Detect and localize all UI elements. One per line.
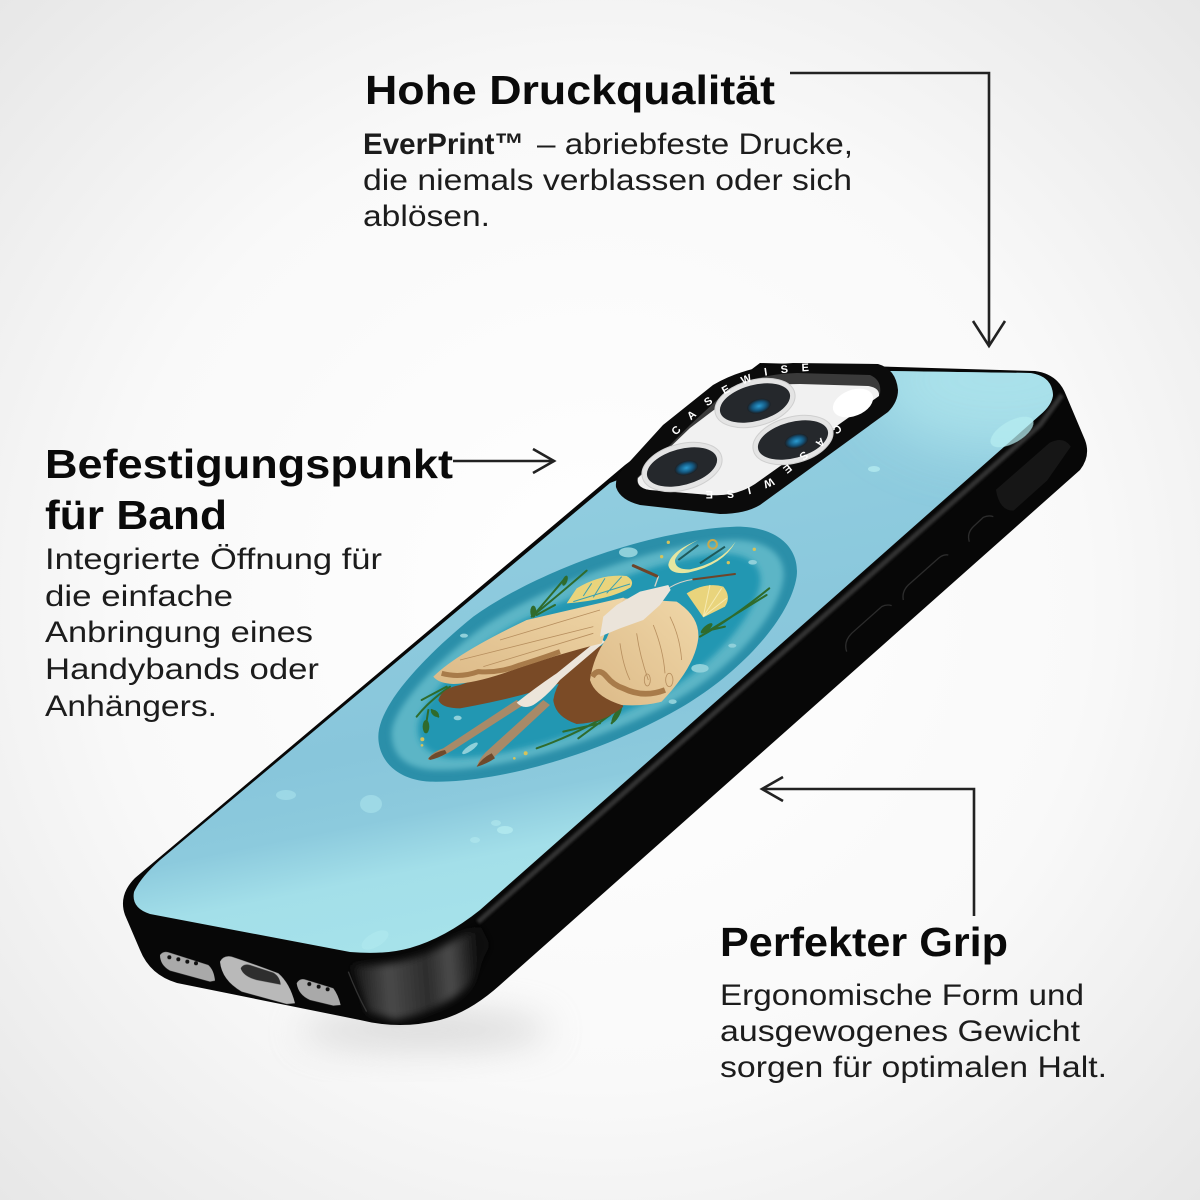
lemon slice left [567, 576, 632, 603]
heading: strap attachment [45, 441, 453, 538]
hind legs [428, 700, 523, 760]
speaker holes [167, 955, 330, 991]
upper left wing [433, 598, 647, 684]
right lens [747, 407, 839, 473]
charging port [220, 956, 295, 1004]
rear screen artwork panel [134, 371, 1053, 953]
camera bump [616, 363, 898, 514]
body: strap attachment: Handybands oder [45, 653, 319, 686]
bump frame [616, 363, 898, 514]
text block: strap attachment [45, 441, 453, 723]
charging port opening [241, 965, 281, 985]
upper right wing [590, 598, 698, 705]
arrow: print quality [790, 73, 1005, 346]
flash [829, 383, 877, 423]
body: grip: ausgewogenes Gewicht [720, 1015, 1081, 1048]
dark lower left wing [438, 643, 593, 708]
arrow: strap attachment [453, 449, 554, 473]
bottom ports [160, 952, 367, 1012]
sprigs on moon [678, 545, 725, 563]
oval light ring [392, 540, 784, 770]
crescent moon [668, 540, 736, 573]
right speaker [297, 979, 341, 1006]
body: print quality: die niemals verblassen oder sich [363, 164, 852, 197]
oval inner teal [418, 553, 761, 758]
body: strap attachment: Integrierte Öffnung für [45, 543, 382, 576]
body: grip: sorgen für optimalen Halt. [720, 1051, 1107, 1084]
leg tips [428, 750, 495, 767]
rim brand text bottom: CASEWISE [706, 426, 842, 498]
body: strap attachment: die einfache [45, 580, 233, 613]
antennae [633, 566, 735, 587]
rim brand text top: CASEWISE [672, 364, 836, 476]
case body [123, 363, 1087, 1025]
leaves [423, 575, 714, 733]
phone shadow [300, 1010, 550, 1050]
left lens [636, 434, 728, 500]
wing veins [460, 610, 682, 687]
body: strap attachment: Anbringung eines [45, 616, 313, 649]
side edge sheen [478, 395, 1062, 922]
moth artwork oval [378, 527, 797, 782]
heading: grip: Perfekter Grip [720, 919, 1008, 965]
left speaker [160, 952, 215, 982]
upper right wing band [592, 672, 665, 694]
body: strap attachment: Anhängers. [45, 690, 217, 723]
text block: grip [720, 919, 1107, 1084]
small gold and pale dots [420, 540, 756, 760]
heading: print quality: Hohe Druckqualität [365, 67, 775, 113]
corner highlight [352, 925, 490, 1020]
pale water spots [276, 410, 1038, 954]
upper left wing band [442, 652, 560, 675]
body: strap attachment [45, 543, 382, 723]
body: grip [720, 979, 1107, 1084]
lemon slice right [687, 585, 728, 617]
text block: print quality [363, 67, 853, 233]
body: print quality: – abriebfeste Drucke, [537, 128, 853, 161]
body: print quality: EverPrint™ [363, 128, 524, 161]
camera glass [638, 384, 879, 495]
dark lower right wing [553, 645, 623, 724]
white abdomen [517, 638, 605, 707]
upper lens [709, 370, 801, 436]
oval base [378, 527, 797, 782]
camera opening shadow [637, 373, 880, 495]
heading: strap attachment: Befestigungspunkt [45, 441, 453, 487]
pale glow top corner [881, 371, 1053, 473]
arrow: grip [762, 777, 974, 916]
heading: strap attachment: für Band [45, 492, 227, 538]
moth body [600, 585, 671, 637]
sprigs [417, 571, 769, 748]
phone case [122, 363, 1088, 1026]
body: grip: Ergonomische Form und [720, 979, 1084, 1012]
side buttons and switches [846, 441, 1070, 652]
body: print quality: ablösen. [363, 200, 490, 233]
body: print quality [363, 128, 853, 233]
